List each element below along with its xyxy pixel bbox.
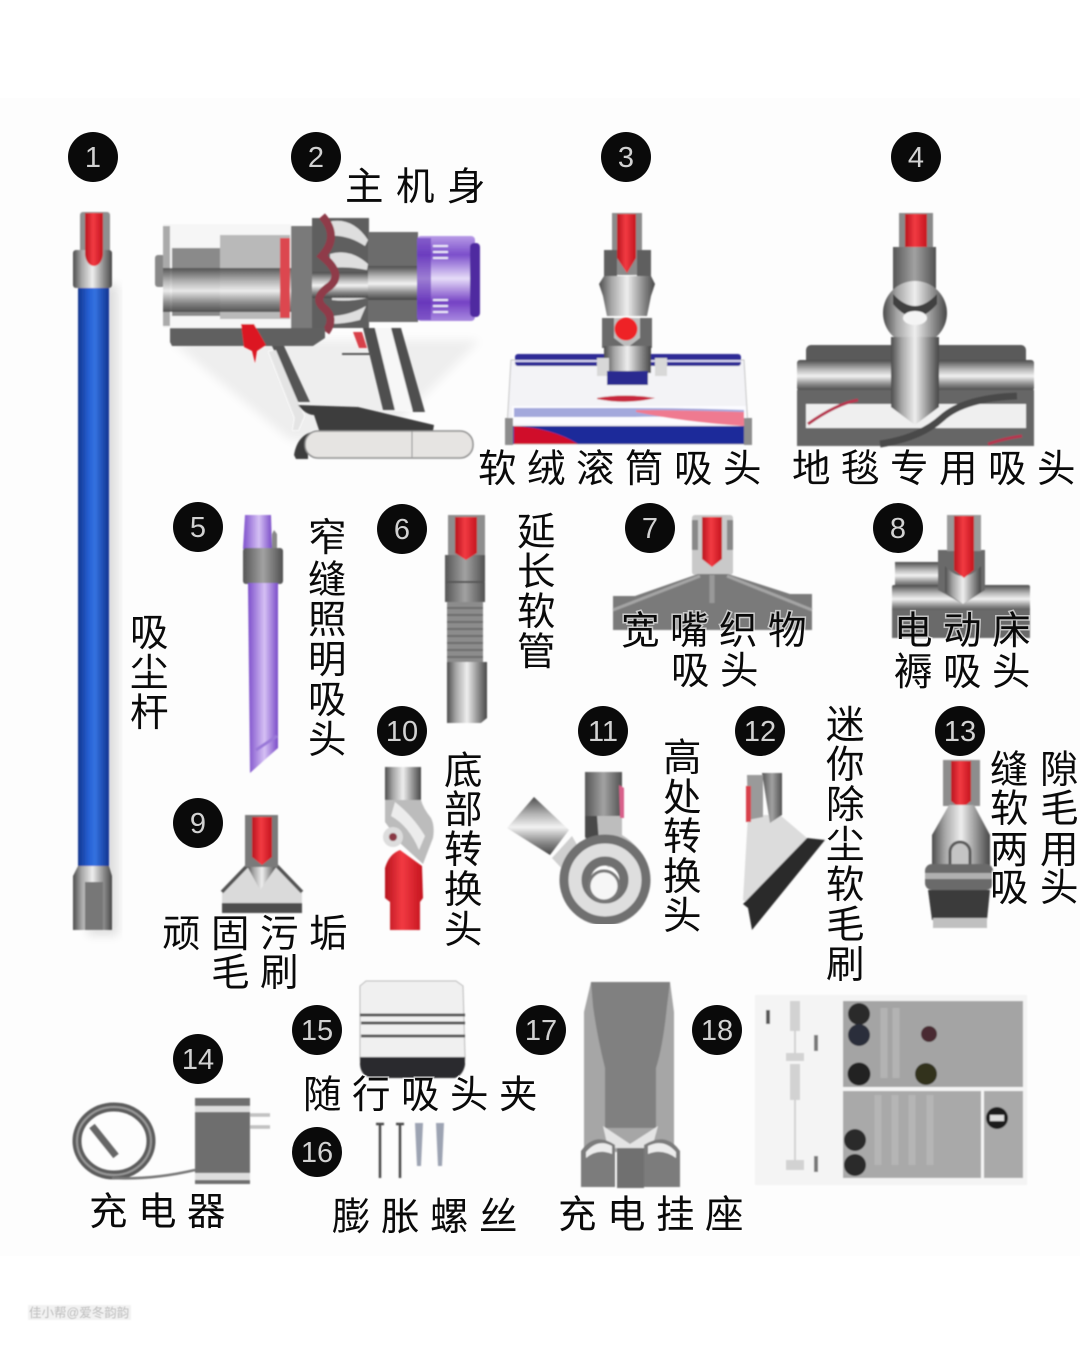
panel: item 12 mini soft brush	[735, 704, 865, 987]
label: 宽嘴织物吸头: 吸头	[671, 650, 769, 693]
panel: item 5 crevice light tool	[173, 502, 347, 773]
number badge 5: 5	[190, 512, 206, 544]
label: 顽固污垢毛刷: 毛刷	[211, 952, 309, 995]
icon: manual sheet	[755, 995, 1027, 1185]
number badge 7	[625, 503, 675, 553]
icon: soft roller head	[505, 213, 752, 445]
panel: item 11 high reach adapter	[507, 706, 702, 938]
icon: wide fabric nozzle	[613, 515, 812, 630]
number badge 9	[173, 798, 223, 848]
icon: purple crevice tool	[243, 515, 283, 773]
number badge 5	[173, 502, 223, 552]
panel: item 3 soft roller head	[478, 132, 772, 491]
icon: blue wand tube	[73, 212, 118, 935]
number badge 12: 12	[744, 716, 776, 748]
watermark: 佳小帮@爱冬韵韵	[29, 1305, 129, 1320]
number badge 17	[516, 1005, 566, 1055]
label: 底部转换头: 换	[444, 869, 483, 912]
number badge 3: 3	[618, 142, 634, 174]
panel: item 14 charger	[77, 1034, 270, 1234]
number badge 11: 11	[588, 716, 618, 748]
label: 宽嘴织物吸头: 宽嘴织物	[621, 610, 817, 653]
label: 延长软管: 管	[517, 631, 556, 674]
number badge 7: 7	[642, 513, 658, 545]
label: 迷你除尘软毛刷: 毛	[826, 904, 865, 947]
number badge 11	[578, 706, 628, 756]
label: 电动床褥吸头: 电动床	[894, 610, 1041, 653]
label: 底部转换头: 部	[444, 789, 483, 832]
panel: item 13 combination tool	[925, 706, 1079, 928]
label: 充电挂座: 充电挂座	[558, 1194, 754, 1237]
label: 随行吸头夹: 随行吸头夹	[303, 1074, 548, 1117]
icon: tool clip	[360, 981, 465, 1078]
number badge 16	[292, 1127, 342, 1177]
label: 窄缝照明吸头: 吸	[308, 679, 347, 722]
number badge 16: 16	[301, 1137, 333, 1169]
number badge 10	[377, 706, 427, 756]
number badge 15: 15	[301, 1015, 333, 1047]
label: 高处转换头: 高	[663, 737, 702, 780]
label: 迷你除尘软毛刷: 软	[826, 864, 865, 907]
number badge 12	[735, 706, 785, 756]
panel: item 16 screws	[292, 1123, 528, 1239]
label: 电动床褥吸头: 褥吸头	[894, 651, 1041, 694]
handle	[272, 346, 310, 402]
label: 缝隙软毛两用吸头: 毛	[1040, 788, 1079, 831]
icon: stubborn dirt brush	[222, 815, 302, 913]
label: 窄缝照明吸头: 明	[308, 639, 347, 682]
label: 吸尘杆: 尘	[130, 652, 169, 695]
label: 窄缝照明吸头: 照	[308, 599, 347, 642]
label: 窄缝照明吸头: 缝	[308, 559, 347, 602]
label: 缝隙软毛两用吸头: 用	[1040, 829, 1079, 872]
icon: expansion screws	[376, 1123, 444, 1178]
icon: motorized mattress tool	[892, 515, 1030, 638]
label: 底部转换头: 头	[444, 909, 483, 952]
label: 高处转换头: 头	[663, 895, 702, 938]
label: 缝隙软毛两用吸头: 吸	[990, 867, 1029, 910]
number badge 10: 10	[386, 716, 418, 748]
icon: mini soft dusting brush	[743, 773, 825, 930]
icon: high reach adapter	[507, 772, 648, 910]
number badge 4	[891, 132, 941, 182]
panel: item 15 clip	[292, 981, 548, 1117]
number badge 6	[377, 504, 427, 554]
icon: carpet head	[797, 213, 1034, 446]
label: 迷你除尘软毛刷: 迷	[826, 704, 865, 747]
label: 迷你除尘软毛刷: 除	[826, 784, 865, 827]
number badge 2	[291, 132, 341, 182]
label: 缝隙软毛两用吸头: 隙	[1040, 749, 1079, 792]
panel: item 4 carpet head	[792, 132, 1080, 491]
label: 缝隙软毛两用吸头: 缝	[990, 749, 1029, 792]
label: 高处转换头: 换	[663, 856, 702, 899]
panel: item 9 stubborn dirt brush	[162, 798, 358, 995]
panel: item 18 manual	[692, 995, 1027, 1185]
label: 吸尘杆: 杆	[130, 692, 169, 735]
label: 软绒滚筒吸头: 软绒滚筒吸头	[478, 448, 772, 491]
number badge 14	[173, 1034, 223, 1084]
number badge 2: 2	[308, 142, 324, 174]
number badge 6: 6	[394, 514, 410, 546]
icon: vacuum main body	[155, 216, 480, 459]
panel: item 7 wide fabric nozzle	[613, 503, 817, 693]
number badge 1	[68, 132, 118, 182]
cyclones	[312, 218, 369, 328]
number badge 13	[935, 706, 985, 756]
number badge 15	[292, 1005, 342, 1055]
number badge 9: 9	[190, 808, 206, 840]
label: 迷你除尘软毛刷: 尘	[826, 824, 865, 867]
label: 高处转换头: 处	[663, 777, 702, 820]
number badge 8: 8	[890, 513, 906, 545]
label: 迷你除尘软毛刷: 你	[826, 744, 865, 787]
label: 缝隙软毛两用吸头: 软	[990, 788, 1029, 831]
icon: lower adapter	[383, 767, 434, 930]
number badge 3	[601, 132, 651, 182]
label: 缝隙软毛两用吸头	[990, 749, 1079, 910]
number badge 8	[873, 503, 923, 553]
label: 缝隙软毛两用吸头: 头	[1040, 867, 1079, 910]
label: 底部转换头: 底	[444, 750, 483, 793]
label: 底部转换头: 转	[444, 829, 483, 872]
label: 延长软管: 长	[517, 551, 556, 594]
label: 窄缝照明吸头: 窄	[308, 517, 347, 560]
number badge 13: 13	[944, 716, 976, 748]
label: 缝隙软毛两用吸头: 两	[990, 829, 1029, 872]
number badge 17: 17	[525, 1015, 557, 1047]
number badge 4: 4	[908, 142, 924, 174]
bin	[163, 224, 291, 328]
label: 膨胀螺丝: 膨胀螺丝	[332, 1196, 528, 1239]
panel: item 8 mattress tool	[873, 503, 1041, 694]
panel: item 6 extension hose	[377, 504, 556, 723]
icon: charger with cable	[77, 1098, 270, 1184]
label: 顽固污垢毛刷: 顽固污垢	[162, 913, 358, 956]
label: 地毯专用吸头: 地毯专用吸头	[792, 448, 1080, 491]
label: 延长软管: 软	[517, 591, 556, 634]
label: 高处转换头: 转	[663, 816, 702, 859]
panel: item 2 main body	[155, 132, 498, 459]
label: 主机身: 主机身	[345, 166, 498, 209]
label: 迷你除尘软毛刷: 刷	[826, 944, 865, 987]
label: 窄缝照明吸头: 头	[308, 719, 347, 762]
number badge 18	[692, 1005, 742, 1055]
icon: combination tool	[925, 760, 993, 928]
label: 吸尘杆: 吸	[130, 612, 169, 655]
panel: item 17 charging dock	[516, 982, 754, 1237]
number badge 14: 14	[182, 1044, 214, 1076]
number badge 1: 1	[85, 142, 101, 174]
icon: charging dock	[581, 982, 680, 1188]
panel: item 10 lower adapter	[377, 706, 483, 952]
icon: extension hose	[445, 515, 487, 723]
panel: item 1 wand	[68, 132, 169, 935]
label: 充电器: 充电器	[89, 1191, 236, 1234]
label: 延长软管: 延	[517, 511, 556, 554]
number badge 18: 18	[701, 1015, 733, 1047]
